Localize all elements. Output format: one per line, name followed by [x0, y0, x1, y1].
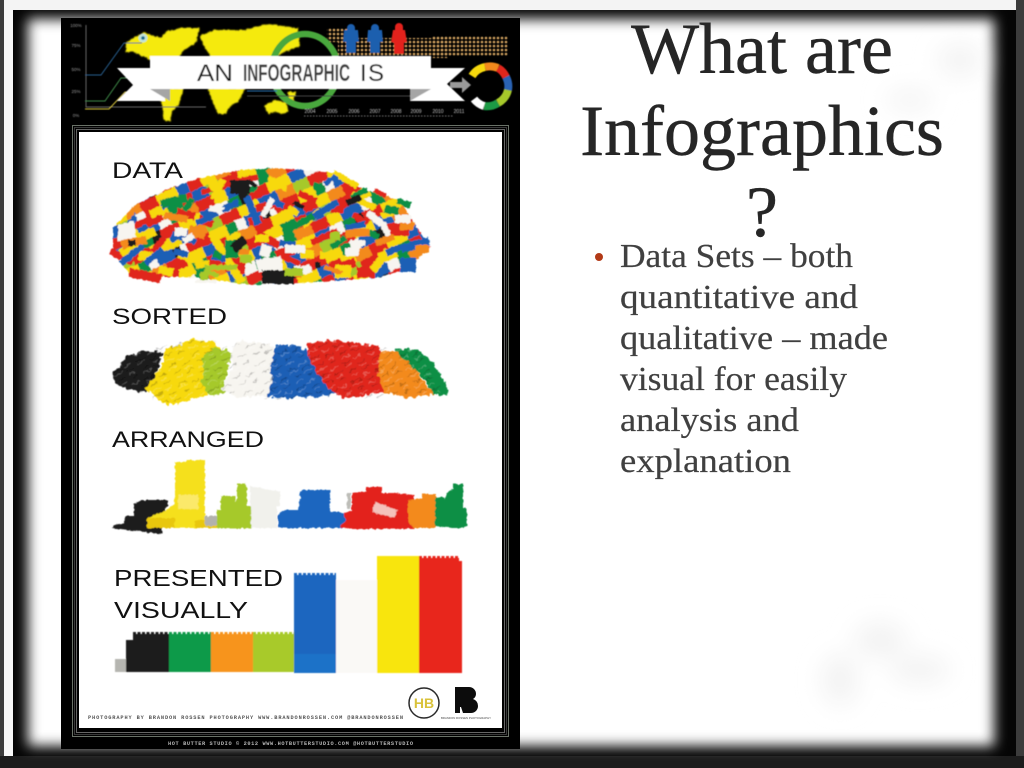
banner title: IS: [360, 60, 384, 87]
credit line: hot butter studio: HOT BUTTER STUDIO © 2012 WWW.HOTBUTTERSTUDIO.COM @HOTBUTTERSTUDIO: [168, 740, 413, 747]
body copy: qualitative – made: [620, 320, 888, 357]
credit line: photography: PHOTOGRAPHY BY BRANDON ROSSEN PHOTOGRAPHY WWW.BRANDONROSSEN.COM @BRANDONROSSEN: [88, 715, 403, 721]
year labels: 2009: [410, 109, 422, 115]
title: ?: [746, 172, 778, 252]
axis percent labels: 75%: [71, 43, 81, 48]
bullet text: [595, 238, 888, 480]
poster: an infographic is: [61, 18, 520, 749]
banner: [150, 56, 431, 89]
lego stacks: arranged: [112, 460, 467, 534]
label: presented visually: [114, 565, 283, 623]
year labels: 2011: [454, 109, 465, 115]
yellow world map: [126, 24, 300, 122]
year labels: 2006: [348, 109, 360, 115]
logo: hot butter badge: [409, 688, 439, 718]
logo: hot butter badge: HB: [414, 695, 434, 711]
axis percent labels: 50%: [71, 67, 81, 72]
title: What are: [631, 9, 893, 89]
poster inner panel with frame: [72, 126, 508, 736]
body copy: [620, 238, 888, 480]
axis percent labels: 25%: [71, 89, 81, 94]
green ring: [272, 34, 338, 106]
arrow: [450, 77, 471, 93]
label: presented visually: VISUALLY: [114, 597, 248, 623]
bullet marker: [595, 253, 603, 261]
lego studs: [133, 557, 459, 633]
chart axis and trend lines: [85, 25, 454, 116]
banner title: INFOGRAPHIC: [243, 60, 350, 87]
body copy: visual for easily: [620, 361, 847, 398]
label: presented visually: PRESENTED: [114, 565, 283, 591]
poster header graphic: [70, 23, 508, 122]
banner title: AN: [197, 60, 233, 87]
lego pile: data: [109, 168, 430, 285]
year labels: [304, 109, 465, 115]
lego pile: sorted: [108, 339, 448, 404]
label: sorted: SORTED: [112, 304, 227, 329]
axis percent labels: 0%: [73, 113, 79, 118]
body copy: analysis and: [620, 402, 799, 439]
year labels: 2007: [369, 109, 381, 115]
title: [580, 9, 944, 252]
logo: brandon rossen: BRANDON ROSSEN PHOTOGRAPHY: [441, 716, 491, 720]
banner title: [197, 60, 384, 87]
axis percent labels: 100%: [70, 23, 82, 28]
year labels: 2005: [326, 109, 338, 115]
people icons: [343, 23, 407, 54]
lego bar chart: presented visually: [115, 556, 462, 673]
body copy: Data Sets – both: [620, 238, 853, 275]
year labels: 2008: [390, 109, 402, 115]
body copy: quantitative and: [620, 279, 858, 316]
year labels: 2010: [432, 109, 444, 115]
body copy: explanation: [620, 443, 791, 480]
label: arranged: ARRANGED: [112, 427, 264, 452]
year labels: 2004: [304, 109, 316, 115]
map pin: [138, 34, 148, 42]
logo: brandon rossen: [441, 687, 491, 720]
label: data: DATA: [112, 158, 183, 183]
dotted world map: [327, 28, 508, 58]
colour donut: [472, 66, 508, 106]
banner tails: [117, 68, 465, 101]
title: Infographics: [580, 91, 944, 171]
axis percent labels: [70, 23, 82, 118]
